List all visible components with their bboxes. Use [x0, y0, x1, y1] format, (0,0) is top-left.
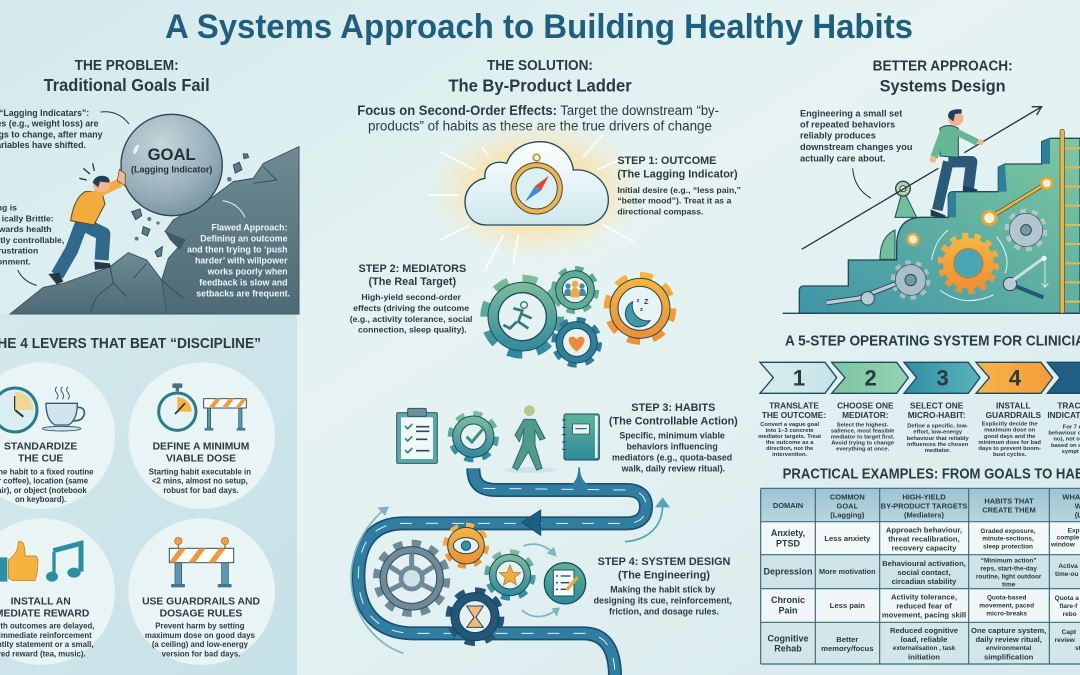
table row: anxiety: Less anxiety — [824, 534, 871, 543]
step 1 text: Initial desire (e.g., “less pain,” — [617, 185, 741, 195]
table row: depression: time — [1002, 581, 1016, 588]
step 1 text — [617, 155, 743, 216]
step 2 chevron: CHOOSE ONE — [837, 401, 894, 411]
table row: depression: “Minimum action” — [981, 557, 1037, 564]
table row: cognitive rehab: environmental — [986, 644, 1032, 651]
step 4 chevron: days to prevent boom- — [978, 446, 1041, 452]
lever: minimum viable dose: VIABLE DOSE — [166, 453, 236, 464]
table header: GOAL — [837, 501, 859, 510]
step 1 chevron: 1 — [793, 365, 805, 390]
step 3 chevron — [904, 362, 980, 454]
lever: guardrails and dosage: DOSAGE RULES — [160, 608, 242, 619]
illustration: climbing person — [930, 109, 984, 218]
step 3 text — [609, 402, 738, 473]
lever: standardize the cue: THE CUE — [18, 453, 63, 464]
icon: clipboard — [397, 408, 437, 463]
lever: minimum viable dose: DEFINE A MINIMUM — [153, 441, 249, 452]
step 5 chevron: sympt — [1062, 449, 1079, 455]
heading: the problem — [44, 58, 210, 95]
table row: chronic pain: flare-f — [1059, 602, 1078, 609]
table row: chronic pain: reduced fear of — [896, 601, 952, 610]
table header: BY-PRODUCT TARGETS — [881, 501, 967, 510]
step 3 chevron: effort, low-energy — [913, 430, 963, 436]
table row: anxiety: Graded exposure, — [980, 527, 1036, 534]
panel: the solution upper — [350, 58, 743, 365]
table — [761, 488, 1080, 664]
gear: running figure — [485, 279, 560, 354]
table row: depression: circadian stability — [892, 576, 957, 585]
table row: cognitive rehab: One capture system, — [971, 625, 1046, 634]
step 4 chevron — [976, 362, 1053, 458]
gear: moon: z — [640, 307, 643, 313]
table row: cognitive rehab: memory/focus — [821, 643, 874, 652]
step 3 text: mediators (e.g., quota-based — [612, 453, 732, 463]
step 4 chevron: minimum dose for bad — [978, 440, 1041, 446]
table header: COMMON — [830, 492, 865, 501]
illustration: boulder goal: (Lagging Indicator) — [131, 164, 212, 174]
step 2 text: High-yield second-order — [361, 292, 462, 302]
heading: better approach — [873, 59, 1013, 95]
step 4 text: friction, and dosage rules. — [609, 606, 719, 616]
callout: flawed approach: Defining an outcome — [200, 233, 288, 243]
callout: engineering text: reliably produces — [800, 131, 876, 141]
step 2 text — [350, 263, 475, 335]
panel: the 4 levers — [0, 336, 275, 665]
lever: standardize the cue — [0, 362, 115, 509]
table row: depression: Depression — [764, 567, 812, 577]
step 1 text: STEP 1: OUTCOME — [617, 155, 716, 167]
lever: immediate reward: INSTALL AN — [11, 596, 71, 607]
illustration: staircase machine — [783, 129, 1080, 313]
callout: flawed approach: and then trying to ‘push — [187, 244, 288, 254]
lever: guardrails and dosage: USE GUARDRAILS AND — [142, 596, 260, 607]
gear: people — [554, 269, 596, 311]
step 2 text: (The Real Target) — [369, 276, 457, 288]
step 4 chevron: Explicitly decide the — [982, 422, 1038, 428]
table row: cognitive rehab: Reduced cognitive — [890, 625, 958, 634]
step 1 text: directional compass. — [617, 206, 703, 216]
step 1 chevron: intervention. — [772, 452, 808, 458]
step 4 text: designing its cue, reinforcement, — [594, 595, 732, 605]
gear: grey wheel — [377, 544, 446, 613]
title: A Systems Approach to Building Healthy Habits — [165, 8, 913, 46]
table row: anxiety: threat recalibration, — [888, 534, 960, 543]
table row: chronic pain: movement, pacing skill — [882, 610, 966, 619]
table row: cognitive rehab: Cognitive — [768, 633, 808, 643]
callout: engineering text: downstream changes you — [800, 142, 912, 152]
lever: standardize the cue: STANDARDIZE — [4, 441, 77, 452]
icon: mediator gears — [485, 269, 672, 365]
step 1 chevron: direction, not the — [766, 446, 814, 452]
table row: depression — [764, 557, 1078, 588]
icon: engineering gears — [377, 526, 586, 643]
step 2 chevron: Select the highest- — [837, 423, 889, 429]
heading: 4 levers: HE 4 LEVERS THAT BEAT “DISCIPLINE” — [0, 336, 261, 352]
illustration: boulder goal: GOAL — [148, 145, 196, 164]
heading: better approach: BETTER APPROACH: — [873, 59, 1013, 75]
callout: lagging indicators — [0, 108, 129, 150]
table row: chronic pain: Chronic — [771, 595, 805, 605]
step 3 text: Specific, minimum viable — [619, 431, 725, 441]
callout: engineering text: actually care about. — [800, 153, 885, 163]
table row: cognitive rehab — [768, 625, 1080, 661]
icon: notebook — [562, 414, 599, 460]
step 3 chevron: MICRO-HABIT: — [908, 410, 966, 420]
heading: the problem: Traditional Goals Fail — [44, 75, 210, 95]
table header — [773, 492, 1080, 519]
step 1 chevron: into 1–3 concrete — [766, 428, 814, 434]
lever: minimum viable dose: Starting habit executable in — [149, 467, 251, 476]
step 4 chevron: GUARDRAILS — [986, 410, 1042, 420]
intro text: Focus on Second-Order Effects: Target the downstream “by- — [357, 102, 727, 117]
table header: CREATE THEM — [982, 505, 1036, 514]
curved arrows — [351, 497, 670, 653]
step 4 text: STEP 4: SYSTEM DESIGN — [598, 556, 731, 568]
icon: walking figure — [503, 405, 557, 473]
table row: anxiety: comple — [1057, 534, 1080, 541]
table row: cognitive rehab: Capt — [1062, 628, 1077, 635]
table row: depression: Behavioural activation, — [882, 558, 966, 567]
gear: upper grey — [1007, 211, 1045, 249]
table header: (Mediaters) — [904, 510, 944, 519]
table row: anxiety: Anxiety, — [771, 528, 805, 538]
step 5 chevron — [1047, 362, 1080, 455]
table row: anxiety: recovery capacity — [892, 543, 957, 552]
step 4 chevron: maximum dose on — [984, 428, 1036, 434]
table row: depression: More motivation — [819, 567, 876, 576]
step 1 chevron: mediator targets. Treat — [758, 434, 821, 440]
callout: goal setting is brittle: ically Brittle: — [2, 213, 54, 223]
step 3 text: walk, daily review ritual). — [621, 463, 725, 473]
table row: cognitive rehab: review — [1055, 636, 1076, 643]
callout: flawed approach: feedback is slow and — [199, 278, 288, 288]
lever: guardrails and dosage: version for bad days. — [162, 649, 240, 658]
heading: the solution: THE SOLUTION: — [487, 58, 593, 74]
step 3 chevron: influences the chosen — [907, 442, 969, 448]
callout: flawed approach: harder’ with willpower — [195, 256, 288, 266]
panel: 5-step operating system — [758, 334, 1080, 458]
table row: chronic pain: movement, paced — [979, 602, 1034, 609]
table row: anxiety — [771, 525, 1080, 552]
lever: minimum viable dose: robust for bad days. — [163, 485, 239, 494]
illustration: person pushing boulder — [48, 163, 125, 284]
step 2 chevron — [831, 362, 908, 453]
callout: flawed approach: Flawed Approach: — [211, 222, 288, 232]
step 4 text — [594, 556, 734, 616]
callout: engineering text: Engineering a small set — [800, 108, 902, 118]
step 2 text: (e.g., activity tolerance, social — [350, 314, 472, 324]
step 4 chevron: good days and the — [984, 434, 1036, 440]
step 1 chevron — [758, 362, 837, 458]
table header: DOMAIN — [773, 501, 803, 510]
table row: anxiety: PTSD — [776, 538, 800, 548]
table row: anxiety: Exp — [1068, 527, 1080, 534]
icon: cloud with compass — [427, 120, 647, 270]
road path — [358, 467, 646, 675]
table row: chronic pain: Less pain — [830, 601, 865, 610]
heading: the solution — [448, 58, 632, 95]
lever: guardrails and dosage — [128, 518, 275, 665]
callout: engineering text — [800, 108, 915, 198]
heading: better approach: Systems Design — [880, 76, 1006, 95]
table row: chronic pain: Quota-based — [987, 594, 1027, 601]
step 2 chevron: 2 — [865, 365, 877, 390]
lever: minimum viable dose — [128, 362, 275, 509]
step 3 chevron: Define a specific, low- — [907, 424, 968, 430]
step 3 text: (The Controllable Action) — [609, 416, 738, 428]
step 1 chevron: the outcome as a — [766, 440, 814, 446]
callout: flawed approach — [187, 201, 290, 299]
table row: depression: routine, light outdoor — [976, 573, 1042, 580]
step 2 chevron: Avoid trying to change — [831, 441, 895, 447]
step 2 text: STEP 2: MEDIATORS — [358, 263, 466, 275]
lever: guardrails and dosage: (a ceiling) and low-energy — [152, 639, 249, 648]
step 4 chevron: INSTALL — [996, 401, 1031, 411]
lever: guardrails and dosage: Prevent harm by setting — [155, 621, 245, 630]
gear: lower grey — [893, 263, 928, 297]
step 3 text: behaviors influencing — [626, 442, 718, 452]
table header: (Lagging) — [830, 510, 865, 519]
table row: anxiety: Approach behaviour, — [886, 525, 962, 534]
panel: the solution lower — [351, 402, 738, 675]
step 1 text: “better mood”). Treat it as a — [617, 196, 732, 206]
lever: minimum viable dose: <2 mins, almost no setup, — [152, 476, 248, 485]
panel: practical examples — [761, 467, 1080, 664]
step 1 chevron: TRANSLATE — [769, 401, 819, 411]
table row: cognitive rehab: simplification — [984, 652, 1034, 661]
table row: cognitive rehab: daily review ritual, — [975, 634, 1042, 643]
table row: depression: reps, start-the-day — [980, 565, 1037, 572]
table row: anxiety: window — [1050, 541, 1076, 548]
table row: anxiety: minute-sections, — [982, 535, 1034, 542]
table row: anxiety: sleep protection — [983, 543, 1033, 550]
step 2 text: effects (driving the outcome — [353, 303, 469, 313]
step 1 chevron: THE OUTCOME: — [762, 410, 826, 420]
step 4 chevron: 4 — [1009, 365, 1022, 390]
heading: the solution: The By-Product Ladder — [448, 75, 632, 95]
step 3 chevron: behaviour that reliably — [907, 436, 970, 442]
table row: depression: social contact, — [897, 567, 951, 576]
table row: chronic pain: Activity tolerance, — [891, 592, 957, 601]
icon: check gear — [451, 414, 496, 459]
step 2 chevron: salience, most feasible — [831, 429, 895, 435]
table row: chronic pain: rebo — [1063, 610, 1077, 617]
panel: the problem — [0, 58, 299, 314]
gear: moon: z — [637, 298, 640, 304]
step 3 text: STEP 3: HABITS — [631, 402, 715, 414]
illustration: rising arrow — [802, 107, 1042, 249]
gear: heart — [554, 320, 599, 365]
intro text: products” of habits as these are the true drivers of change — [368, 118, 712, 133]
gear: moon — [608, 276, 672, 341]
step 2 chevron: mediator to target first. — [831, 435, 895, 441]
gear: star — [487, 552, 533, 598]
table row: depression: time-ou — [1055, 570, 1078, 577]
step 2 text: connection, sleep quality). — [358, 325, 467, 335]
table header: HIGH-YIELD — [902, 492, 946, 501]
step 3 chevron: SELECT ONE — [910, 401, 964, 411]
illustration: rock slope — [10, 147, 299, 314]
callout: engineering text: of repeated behaviors — [800, 120, 895, 130]
lever: guardrails and dosage: maximum dose on good days — [145, 630, 256, 639]
illustration: boulder goal — [121, 114, 222, 216]
step 1 chevron: Convert a vague goal — [760, 422, 820, 428]
table row: cognitive rehab: load, reliable — [901, 634, 947, 643]
table row: chronic pain: Quota a — [1055, 594, 1079, 601]
lever: standardize the cue: on keyboard). — [15, 494, 66, 503]
lever: immediate reward — [0, 518, 115, 665]
step 4 chevron: bust cycles. — [993, 452, 1027, 458]
heading: the problem: THE PROBLEM: — [75, 58, 179, 74]
step 3 chevron: mediator. — [925, 448, 951, 454]
step 2 chevron: MEDIATOR: — [842, 410, 889, 420]
callout: lagging indicators: “Lagging Indicatars”: — [0, 108, 89, 118]
table row: chronic pain: Pain — [779, 605, 797, 615]
callout: flawed approach: works poorly when — [207, 267, 288, 277]
gear: moon: Z — [644, 297, 649, 306]
gear: hourglass — [449, 591, 501, 643]
gear: main orange — [941, 236, 995, 290]
table row: cognitive rehab: externalisation , task — [893, 644, 956, 651]
table header: HABITS THAT — [984, 496, 1034, 505]
panel: better approach — [783, 59, 1080, 313]
callout: flawed approach: setbacks are frequent. — [196, 289, 290, 299]
table row: chronic pain: micro-breaks — [986, 610, 1027, 617]
gear: orange eye — [446, 526, 486, 566]
table row: cognitive rehab: initiation — [908, 652, 940, 661]
step 4 text: Making the habit stick by — [610, 584, 715, 594]
icon: checklist badge — [544, 563, 586, 604]
callout: goal setting is brittle — [0, 202, 67, 285]
table row: cognitive rehab: Rehab — [774, 644, 802, 654]
step 3 chevron: 3 — [937, 365, 949, 390]
table row: cognitive rehab: Better — [836, 634, 858, 643]
table row: depression: Activa — [1058, 562, 1078, 569]
step 2 chevron: everything at once. — [836, 447, 890, 453]
table row: chronic pain — [771, 592, 1079, 619]
step 4 text: (The Engineering) — [618, 569, 710, 581]
step 1 text: (The Lagging Indicator) — [617, 168, 738, 180]
